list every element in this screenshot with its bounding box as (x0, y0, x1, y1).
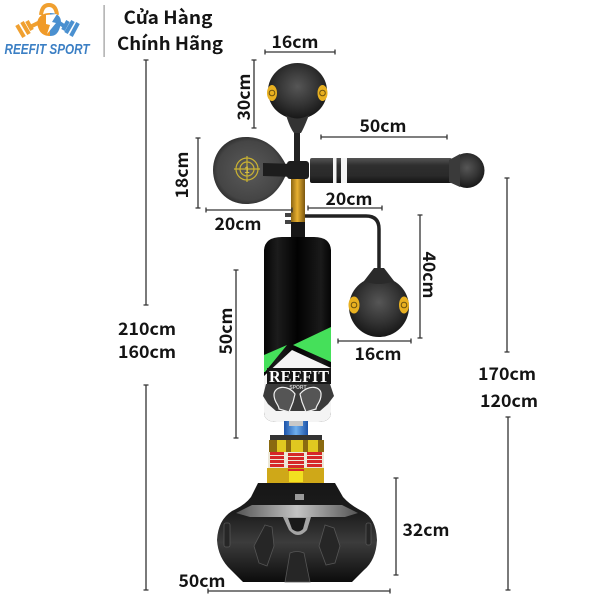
dimension: top ball width 16cm: 16cm (272, 28, 318, 53)
dimension: total height left: 210cm (118, 315, 176, 340)
dimension: top ball height 30cm: 30cm (230, 74, 255, 120)
dimension: striking height right (478, 178, 538, 590)
dimension: paddle height 18cm: 18cm (168, 152, 193, 198)
dimension: top ball width 16cm (265, 28, 335, 54)
cylinder bag (263, 237, 334, 422)
dimension: total height left: 160cm (118, 338, 176, 363)
dimension: striking height right: 120cm (480, 387, 538, 412)
heading: store label (117, 4, 223, 56)
dimension: paddle width 20cm: 20cm (214, 210, 262, 235)
weighted base (217, 483, 377, 582)
left target paddle (213, 137, 296, 204)
dimension: lower ball width 16cm (338, 338, 411, 365)
dimension: hook width 20cm: 20cm (326, 185, 372, 210)
dimension: paddle height 18cm (168, 138, 200, 208)
dimension: arm length 50cm (321, 112, 447, 140)
brand emblem (263, 367, 334, 412)
divider (104, 5, 105, 57)
brand emblem: SPORT (289, 385, 307, 391)
dimension: lower ball width 16cm: 16cm (354, 340, 402, 365)
dimension: striking height right: 170cm (478, 360, 536, 385)
brand name: REEFIT SPORT (4, 41, 91, 58)
dimension: arm length 50cm: 50cm (360, 112, 406, 137)
hub and gold pole (285, 161, 309, 238)
heading: store label: Cửa Hàng (124, 4, 213, 30)
dimension: base width 50cm (178, 567, 390, 594)
dimension: base height 32cm: 32cm (402, 516, 450, 541)
dimension: top ball height 30cm (230, 60, 256, 128)
right arm (310, 153, 484, 188)
left target paddle: 1 (244, 165, 250, 175)
heading: store label: Chính Hãng (117, 30, 223, 56)
hook arm and lower ball (305, 216, 409, 337)
brand logo (4, 5, 91, 58)
dimension: base width 50cm: 50cm (178, 567, 226, 592)
punching bag product (213, 63, 484, 582)
dimension: paddle width 20cm (206, 208, 292, 235)
icon: kettlebell and dumbbell (17, 5, 78, 37)
dimension: hook height 40cm (418, 215, 443, 338)
dimension: hook height 40cm: 40cm (418, 252, 443, 298)
top ball (267, 63, 328, 170)
brand emblem: REEFIT (269, 367, 330, 386)
dimension: total height left (118, 60, 176, 590)
dimension: bag height 50cm: 50cm (212, 308, 237, 354)
dimension: bag height 50cm (212, 270, 238, 438)
spring connector (267, 421, 324, 483)
dimension: base height 32cm (394, 478, 450, 575)
dimension: hook width 20cm (308, 185, 382, 210)
